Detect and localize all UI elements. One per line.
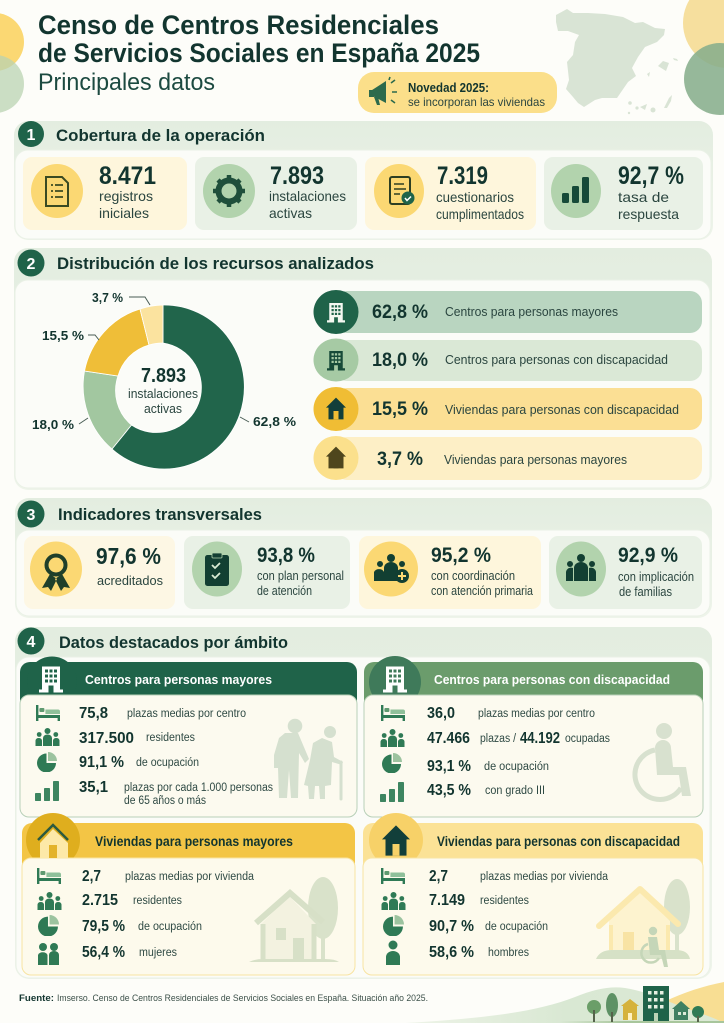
legend row: viviendas discapacidad: 15,5 % <box>372 399 428 420</box>
teal house <box>672 1001 690 1020</box>
card: centros para personas con discapacidad: Centros para personas con discapacidad <box>434 672 670 687</box>
card: cuestionarios cumplimentados: cumplimentados <box>436 206 524 222</box>
card: plan personal: con plan personal <box>257 568 344 583</box>
data rows: 91,1 % <box>79 754 124 771</box>
legend row: viviendas discapacidad: Viviendas para personas con discapacidad <box>445 403 679 417</box>
card: plan personal: de atención <box>257 583 312 598</box>
data rows <box>37 868 255 965</box>
source note: Imserso. Censo de Centros Residenciales de Servicios Sociales en España. Situación año 2025. <box>57 993 428 1004</box>
heading: Distribución de los recursos analizados <box>57 254 374 273</box>
data rows: plazas medias por centro <box>478 708 595 720</box>
card: implicación de familias: con implicación <box>618 569 694 584</box>
card: implicación de familias <box>549 536 702 609</box>
card: viviendas para personas mayores: Viviendas para personas mayores <box>95 834 293 849</box>
card: acreditados: 97,6 % <box>96 543 161 569</box>
title: Censo de Centros Residenciales <box>38 10 439 40</box>
data rows: 2,7 <box>82 868 101 885</box>
card: tasa de respuesta: respuesta <box>618 206 679 222</box>
card: centros para personas mayores <box>20 656 357 817</box>
data rows: residentes <box>480 895 529 907</box>
card: cuestionarios cumplimentados: cuestionarios <box>436 189 514 205</box>
footer landscape illustration <box>405 982 724 1023</box>
decorative corner circles left <box>0 13 24 113</box>
data rows: 79,5 % <box>82 918 125 935</box>
panel 1: cobertura de la operación <box>14 121 713 240</box>
data rows: con grado III <box>485 785 545 797</box>
donut chart: 15,5 % <box>42 328 84 343</box>
data rows: de ocupación <box>484 761 549 773</box>
source note: Fuente: <box>19 993 54 1004</box>
card: acreditados: acreditados <box>97 573 163 588</box>
legend row: centros discapacidad: Centros para personas con discapacidad <box>445 353 668 367</box>
trees <box>587 993 704 1022</box>
card: instalaciones activas <box>195 157 357 230</box>
card: registros iniciales: registros <box>99 188 153 204</box>
data rows <box>380 705 610 802</box>
section number 3: 3 <box>27 507 36 524</box>
data rows: ocupadas <box>565 733 610 745</box>
card: tasa de respuesta: tasa de <box>618 189 669 205</box>
card: implicación de familias: 92,9 % <box>618 544 678 567</box>
legend row: centros discapacidad <box>314 338 702 382</box>
card: coordinación atención primaria: con atención primaria <box>431 583 534 598</box>
data rows: de 65 años o más <box>124 795 206 807</box>
section number 2: 2 <box>27 256 36 273</box>
data rows: de ocupación <box>485 921 548 933</box>
data rows: plazas medias por vivienda <box>480 871 609 883</box>
green building <box>643 986 669 1021</box>
data rows: 43,5 % <box>427 782 471 799</box>
callout: novedad 2025 <box>358 72 557 113</box>
card: viviendas para personas con discapacidad: Viviendas para personas con discapacidad <box>437 834 680 849</box>
data rows: de ocupación <box>136 757 199 769</box>
legend row: centros mayores: 62,8 % <box>372 302 428 323</box>
donut chart: 7.893 <box>141 365 186 387</box>
card: instalaciones activas: instalaciones <box>269 188 346 204</box>
data rows: 2.715 <box>82 892 118 909</box>
donut chart: 18,0 % <box>32 417 74 432</box>
card: implicación de familias: de familias <box>619 584 672 599</box>
watermark: wheelchair <box>635 723 691 800</box>
data rows: plazas medias por centro <box>127 708 246 720</box>
icon: house <box>38 825 68 858</box>
data rows <box>381 868 609 965</box>
watermark: elderly couple <box>274 719 343 799</box>
heading: Datos destacados por ámbito <box>59 633 288 652</box>
data rows: plazas medias por vivienda <box>125 871 255 883</box>
donut chart: 62,8 % <box>253 414 296 429</box>
card: coordinación atención primaria: 95,2 % <box>431 544 491 567</box>
data rows: 58,6 % <box>429 944 474 961</box>
data rows: mujeres <box>139 947 177 959</box>
card: registros iniciales: iniciales <box>99 205 149 221</box>
data rows: 90,7 % <box>429 918 474 935</box>
title <box>38 10 480 68</box>
watermark: house and tree <box>249 877 339 962</box>
card: plan personal <box>184 536 350 609</box>
legend row: viviendas mayores: 3,7 % <box>377 449 423 470</box>
heading: Cobertura de la operación <box>56 126 265 145</box>
subtitle: Principales datos <box>38 69 215 96</box>
data rows: 35,1 <box>79 779 108 796</box>
legend row: viviendas mayores <box>314 436 702 480</box>
icon: building <box>39 666 63 692</box>
icon: women <box>38 943 59 965</box>
card: plan personal: 93,8 % <box>257 544 315 567</box>
card: cuestionarios cumplimentados: 7.319 <box>437 162 488 190</box>
data rows: 7.149 <box>429 892 465 909</box>
legend row: centros discapacidad: 18,0 % <box>372 350 428 371</box>
data rows: 75,8 <box>79 705 108 722</box>
card: centros para personas mayores: Centros para personas mayores <box>85 672 272 687</box>
card: tasa de respuesta <box>544 157 703 230</box>
watermark: house, tree and wheelchair <box>596 879 690 967</box>
data rows: hombres <box>488 947 529 959</box>
decorative corner circles right <box>683 0 724 115</box>
legend row: centros mayores <box>314 290 702 334</box>
icon: man <box>386 940 400 965</box>
donut chart: instalaciones <box>128 386 198 401</box>
card: viviendas para personas con discapacidad <box>363 813 703 975</box>
data rows: 44.192 <box>520 730 560 747</box>
legend row: viviendas mayores: Viviendas para personas mayores <box>444 453 627 467</box>
section number 4: 4 <box>27 634 36 651</box>
card: registros iniciales <box>23 157 187 230</box>
panel 4: datos destacados por ámbito <box>15 627 712 979</box>
data rows <box>35 705 273 807</box>
donut chart: activas <box>144 401 182 416</box>
data rows: residentes <box>133 895 182 907</box>
card: instalaciones activas: 7.893 <box>270 162 324 190</box>
section number 3 <box>18 500 44 528</box>
icon: megaphone <box>369 77 397 105</box>
data rows: 56,4 % <box>82 944 125 961</box>
card: tasa de respuesta: 92,7 % <box>618 162 684 190</box>
callout: novedad 2025: Novedad 2025: <box>408 80 489 95</box>
title: de Servicios Sociales en España 2025 <box>38 38 480 68</box>
data rows: plazas por cada 1.000 personas <box>124 782 273 794</box>
data rows: 2,7 <box>429 868 448 885</box>
card: cuestionarios cumplimentados <box>365 157 536 230</box>
card: acreditados <box>24 536 175 609</box>
icon: house <box>382 825 410 856</box>
yellow house <box>621 999 639 1020</box>
data rows: 317.500 <box>79 730 134 747</box>
callout: novedad 2025: se incorporan las viviendas <box>408 95 545 109</box>
card: viviendas para personas mayores <box>22 813 355 975</box>
heading: Indicadores transversales <box>58 505 262 524</box>
donut chart <box>32 291 296 469</box>
data rows: plazas / <box>480 733 517 745</box>
section number 2 <box>18 250 44 276</box>
data rows: de ocupación <box>138 921 202 933</box>
map of Spain <box>556 9 678 114</box>
data rows: 36,0 <box>427 705 455 722</box>
card: instalaciones activas: activas <box>269 205 312 221</box>
card: coordinación atención primaria <box>359 536 541 609</box>
data rows: 47.466 <box>427 730 470 747</box>
legend row: viviendas discapacidad <box>314 387 702 431</box>
card: coordinación atención primaria: con coordinación <box>431 568 515 583</box>
data rows: 93,1 % <box>427 758 471 775</box>
card: centros para personas con discapacidad <box>364 656 703 817</box>
section number 1 <box>18 121 44 147</box>
section number 4 <box>18 628 44 654</box>
card: registros iniciales: 8.471 <box>99 162 156 190</box>
donut chart: 3,7 % <box>92 291 123 305</box>
icon: building <box>383 666 407 692</box>
section number 1: 1 <box>27 127 36 144</box>
panel 3: indicadores transversales <box>15 498 712 618</box>
panel 2: distribución de los recursos analizados <box>14 248 712 490</box>
data rows: residentes <box>146 732 195 744</box>
legend row: centros mayores: Centros para personas mayores <box>445 305 618 319</box>
